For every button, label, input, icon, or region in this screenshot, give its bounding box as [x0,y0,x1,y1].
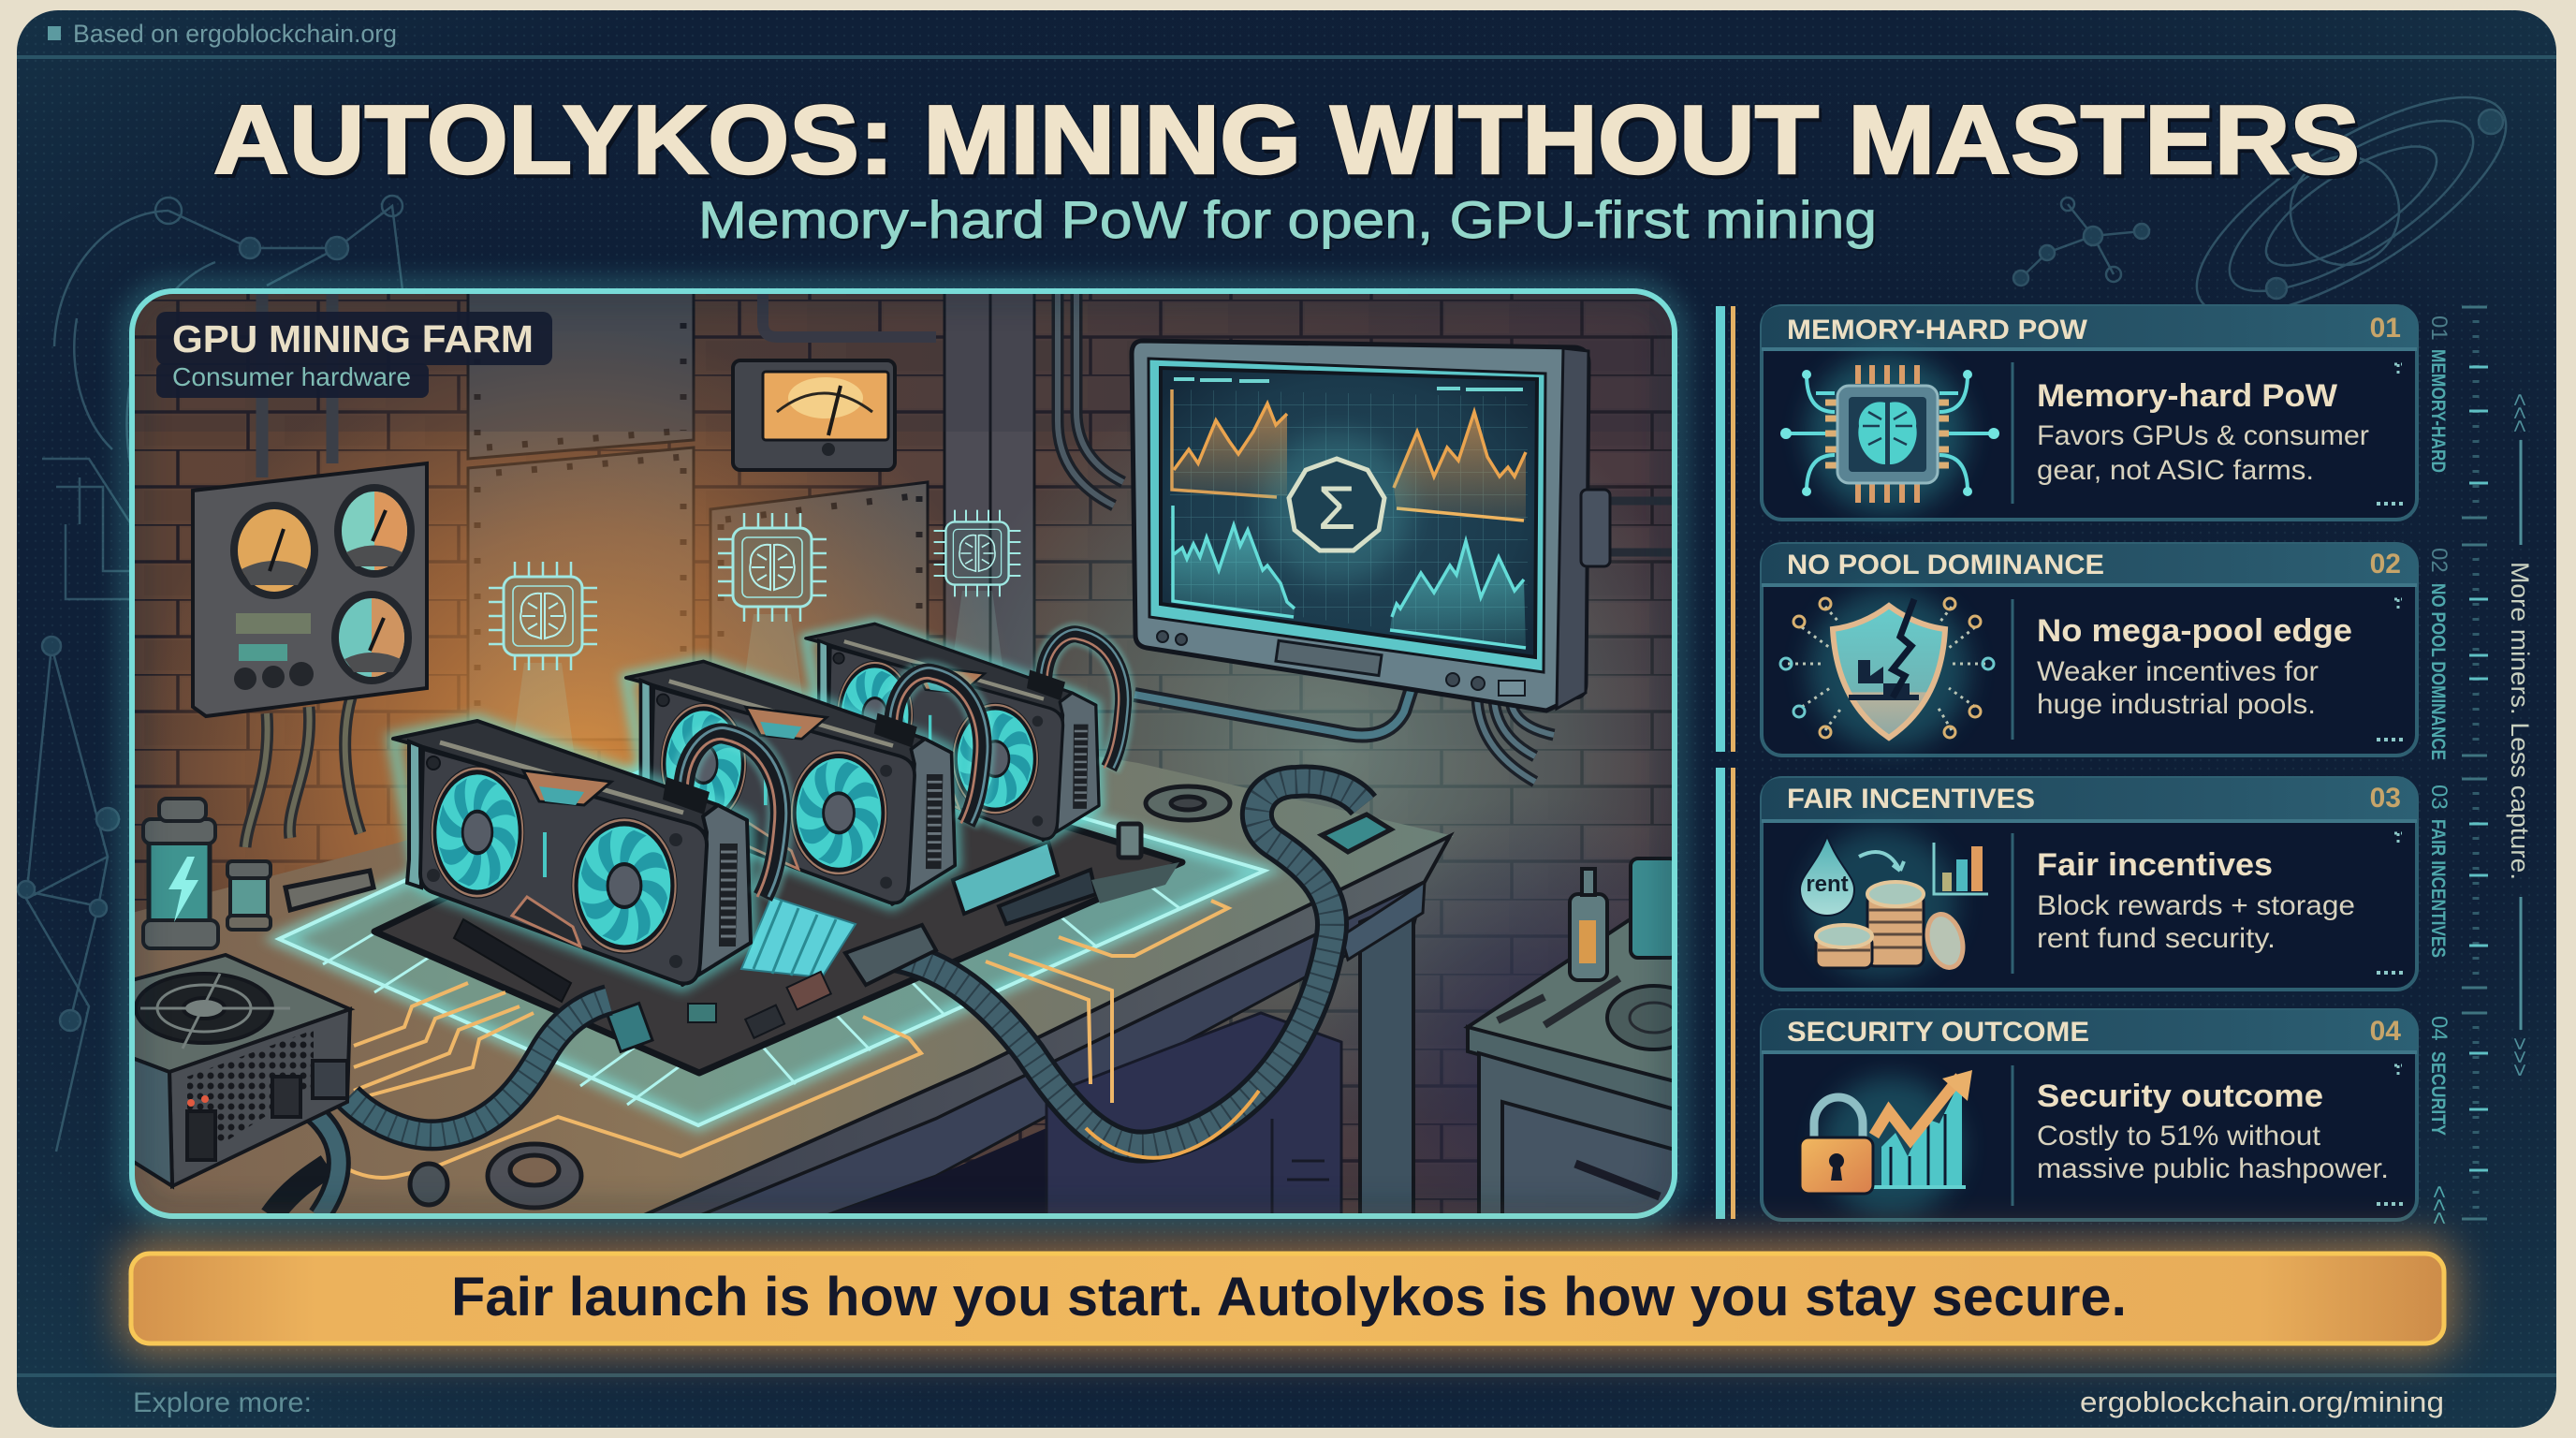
gears and small parts [285,786,1391,1208]
card 1: memory-hard PoW: 01 [2370,313,2401,344]
panel glow [132,291,1675,1216]
panel vignette [132,291,1675,1216]
card 4: security outcome: Costly to 51% without [2037,1121,2321,1152]
vertical side labels: <<< [2426,1185,2452,1225]
card 4: security outcome: 04 [2370,1016,2401,1047]
card 3: fair incentives: 03 [2370,783,2401,814]
icon: brain chip [1780,354,1999,513]
panel label [156,312,552,398]
vertical side labels: 04 [2426,1016,2452,1041]
card 2: no pool dominance: No mega-pool edge [2037,613,2352,649]
icon: cracked shield [1780,590,1994,749]
panel: GPU mining farm illustration [135,294,1672,1213]
braided cables [271,782,1364,1216]
decoration: right orbit and node network [2013,58,2536,354]
control box with gauges [193,291,427,847]
card 1: memory-hard PoW: gear, not ASIC farms. [2037,455,2314,486]
warm light wash [135,294,1672,1213]
GPU 2 [626,661,988,904]
monitor with hashrate charts [1132,341,1674,711]
callout banner [131,1254,2444,1343]
desk [132,730,1454,1216]
orange and teal lines [1172,389,1526,648]
vertical tagline: More miners. Less capture. [2506,562,2534,880]
vertical side labels: NO POOL DOMINANCE [2427,583,2449,760]
connector rails [1716,306,1735,1219]
brick wall [132,291,1675,1216]
card 2: no pool dominance: NO POOL DOMINANCE [1787,550,2104,580]
GPU 3 [806,624,1128,840]
card 4: security outcome: massive public hashpower. [2037,1153,2389,1184]
card 3: fair incentives: rent fund security. [2037,923,2276,954]
tick ruler [2462,307,2488,1219]
vertical side labels: 02 [2426,548,2452,573]
vertical tagline: <<< [2507,393,2532,433]
footer link: ergoblockchain.org/mining [2080,1386,2444,1418]
title: AUTOLYKOS: MINING WITHOUT MASTERS [213,86,2360,195]
subtitle: Memory-hard PoW for open, GPU-first mining [698,190,1877,249]
amber power traces [350,901,1228,1178]
banner glow [122,1240,2454,1355]
icon: rent drop and coins: rent [1806,872,1849,897]
card 2: no pool dominance: Weaker incentives for [2037,656,2319,687]
card 1: memory-hard PoW [1762,306,2417,520]
vertical side labels [2426,315,2452,1225]
card 4: security outcome: Security outcome [2037,1078,2323,1114]
card 3: fair incentives: Fair incentives [2037,847,2273,883]
wall conduits [1058,291,1554,782]
card 4: security outcome: SECURITY OUTCOME [1787,1017,2089,1048]
panel border [132,291,1675,1216]
card 3: fair incentives: Block rewards + storage [2037,890,2355,921]
energy cells [143,799,271,948]
vertical side labels: SECURITY [2427,1051,2449,1136]
analog meter [733,360,895,470]
right side workbench [1468,858,1701,1216]
sigma emblem [1262,433,1412,582]
card 2: no pool dominance: 02 [2370,549,2401,580]
icon: padlock with rising chart [1800,1070,1972,1217]
card 1: memory-hard PoW: MEMORY-HARD POW [1787,315,2088,345]
glowing floor grid [279,721,1265,1125]
card 2: no pool dominance: huge industrial pools. [2037,689,2316,720]
card 1: memory-hard PoW: Favors GPUs & consumer [2037,420,2369,451]
power supply [132,955,350,1186]
panel label: Consumer hardware [172,362,411,391]
vertical tagline: >>> [2507,1037,2532,1077]
vertical side labels: 03 [2426,785,2452,810]
motherboard [371,809,1185,1077]
card 2: no pool dominance [1762,544,2417,756]
vertical side labels: MEMORY-HARD [2427,349,2449,473]
vertical side labels: 01 [2426,315,2452,341]
vertical side labels: FAIR INCENTIVES [2427,819,2449,958]
steel wall panels and column [468,291,1034,740]
vertical tagline [2506,393,2534,1077]
decoration: left circuit orbit and constellation [18,196,402,1152]
holographic chips [489,510,1020,813]
callout banner: Fair launch is how you start. Autolykos is how you stay secure. [451,1267,2127,1328]
card 1: memory-hard PoW: Memory-hard PoW [2037,378,2338,414]
card 3: fair incentives: FAIR INCENTIVES [1787,784,2035,814]
icon: rent drop and coins [1800,829,1988,978]
source note: Based on ergoblockchain.org [73,20,397,48]
panel label: GPU MINING FARM [172,317,534,360]
GPU 1 [393,721,786,985]
footer left: Explore more: [133,1387,312,1418]
sigma emblem: Σ [1318,473,1355,542]
card 4: security outcome [1762,1010,2417,1220]
card 3: fair incentives [1762,778,2417,990]
